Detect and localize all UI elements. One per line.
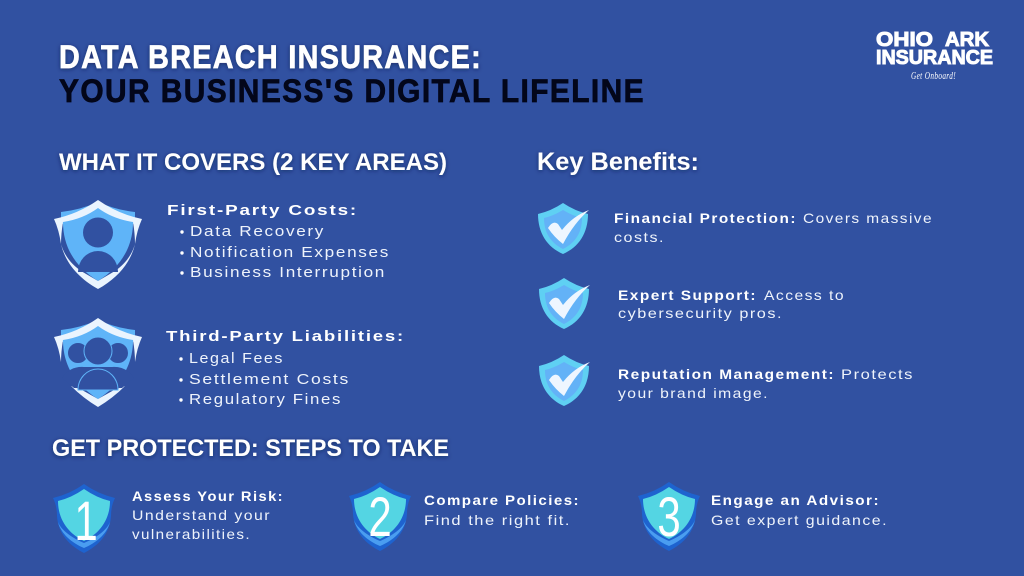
logo: Get Onboard! — [911, 71, 956, 82]
logo: OHIO — [876, 28, 933, 51]
text: expert support: cybersecurity pros. — [618, 305, 783, 321]
text: step 1: vulnerabilities. — [132, 526, 251, 542]
text: step 3 — [711, 493, 888, 528]
icon: step 1 shield: 1 — [74, 490, 98, 552]
text: first-party costs: First-Party Costs: — [167, 203, 358, 219]
panel: get protected — [52, 435, 888, 553]
icon: check shield expert — [539, 278, 590, 329]
text: step 3: Get expert guidance. — [711, 512, 888, 528]
text: reputation management: Reputation Management: — [618, 367, 835, 382]
icon: single person shield — [54, 200, 142, 289]
heading: key benefits: Key Benefits: — [537, 148, 699, 176]
icon: step 3 shield: 3 — [657, 486, 681, 548]
text: first-party costs: Data Recovery — [190, 224, 325, 240]
text: expert support: Access to — [764, 287, 845, 303]
text: third-party liabilities: Legal Fees — [189, 351, 284, 367]
text: step 2: Find the right fit. — [424, 512, 571, 528]
text: step 3: Engage an Advisor: — [711, 493, 880, 508]
text: step 1 — [132, 489, 284, 542]
text: step 2 — [424, 493, 580, 528]
text: third-party liabilities: Settlement Costs — [189, 372, 350, 388]
text: reputation management: Protects — [841, 366, 914, 382]
icon: step 3 shield — [638, 482, 700, 551]
title: DATA BREACH INSURANCE: — [59, 39, 482, 75]
text: reputation management — [618, 366, 914, 401]
text: financial protection: Covers massive — [803, 210, 933, 226]
logo: ARK — [945, 28, 989, 51]
heading: what it covers: WHAT IT COVERS (2 KEY AREAS) — [59, 149, 447, 176]
title — [59, 39, 645, 109]
text: reputation management: your brand image. — [618, 385, 769, 401]
icon: check shield reputation — [539, 355, 590, 406]
text: financial protection: Financial Protection: — [614, 211, 797, 226]
text: financial protection — [614, 210, 933, 245]
text: third-party liabilities: Regulatory Fines — [189, 392, 342, 408]
panel: key benefits — [537, 148, 933, 406]
icon: step 2 shield: 2 — [368, 486, 392, 548]
text: expert support — [618, 287, 845, 321]
text: step 1: Understand your — [132, 507, 271, 523]
icon: step 1 shield — [53, 484, 115, 553]
text: third-party liabilities: Third-Party Liabilities: — [166, 329, 405, 345]
logo — [876, 28, 993, 82]
title: YOUR BUSINESS'S DIGITAL LIFELINE — [59, 73, 645, 109]
text: step 2: Compare Policies: — [424, 493, 580, 508]
icon: group shield — [54, 318, 142, 407]
text: financial protection: costs. — [614, 229, 665, 245]
icon: step 2 shield — [349, 482, 411, 551]
text: first-party costs: Business Interruption — [190, 265, 386, 281]
panel: what it covers — [54, 149, 447, 408]
text: step 1: Assess Your Risk: — [132, 489, 284, 504]
text: third-party liabilities — [166, 329, 405, 408]
text: expert support: Expert Support: — [618, 288, 757, 303]
text: first-party costs: Notification Expenses — [190, 245, 390, 261]
logo: INSURANCE — [876, 46, 993, 69]
icon: check shield financial — [538, 203, 589, 254]
heading: get protected: GET PROTECTED: STEPS TO TAKE — [52, 435, 449, 462]
text: first-party costs — [167, 203, 390, 281]
